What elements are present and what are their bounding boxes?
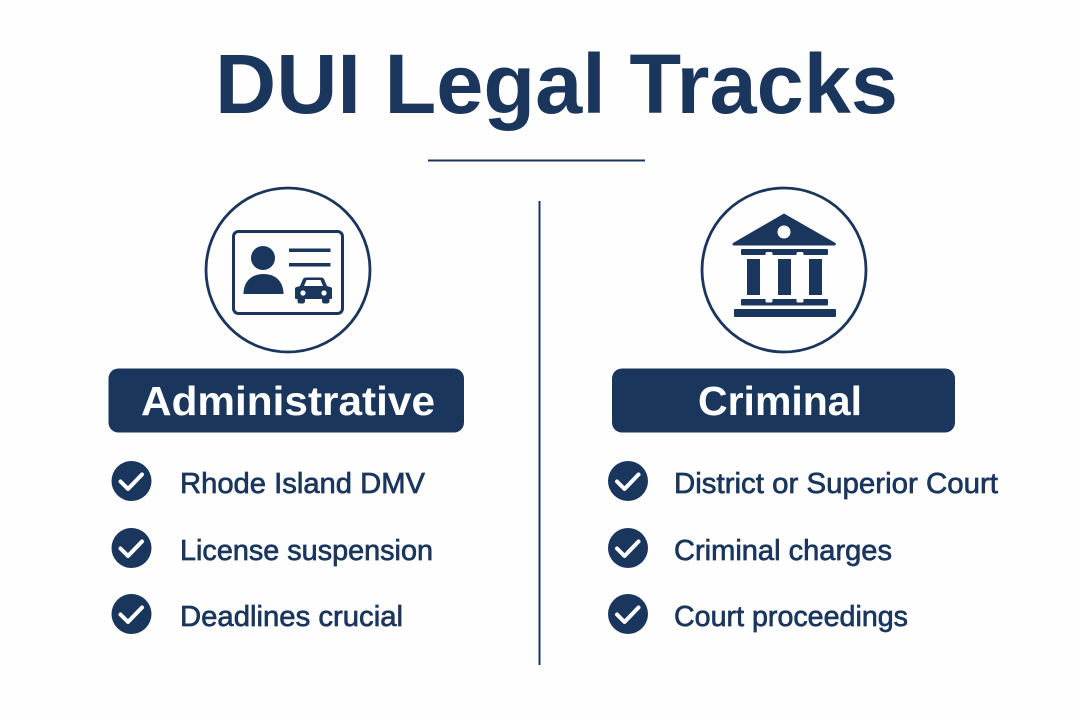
list item: Deadlines crucial [112,594,403,634]
list item: Court proceedings: Court proceedings [674,601,908,633]
list item: License suspension: License suspension [180,535,433,567]
list item: Deadlines crucial: Deadlines crucial [180,601,403,633]
heading: Administrative: Administrative [141,378,435,424]
list item: District or Superior Court [608,461,998,501]
panel: administrative [108,188,464,634]
title: DUI Legal Tracks [215,37,898,131]
list item: Rhode Island DMV: Rhode Island DMV [180,468,426,500]
list item: License suspension [112,528,433,568]
list item: Criminal charges [608,528,892,568]
list item: Court proceedings [608,594,908,634]
list item: Rhode Island DMV [112,461,426,501]
icon: courthouse [702,188,866,352]
heading: Criminal: Criminal [698,378,862,424]
heading: Criminal [612,368,955,432]
list item: District or Superior Court: District or Superior Court [674,468,998,500]
icon: driver license [206,188,370,352]
heading: Administrative [108,368,464,432]
list item: Criminal charges: Criminal charges [674,535,892,567]
panel: criminal [608,188,998,634]
